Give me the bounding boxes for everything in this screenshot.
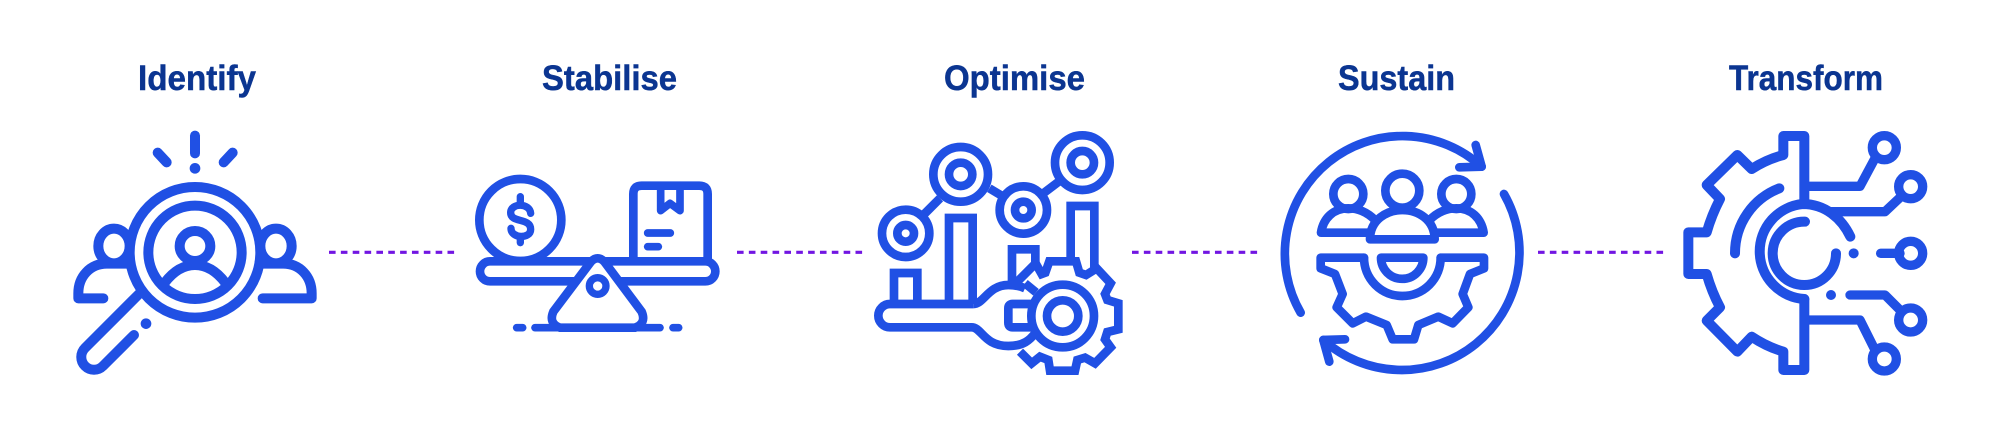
icon: chart, wrench and gear (878, 135, 1118, 371)
icon: half gear with circuit lines (1688, 136, 1923, 371)
heading: Optimise: Optimise (944, 59, 1085, 98)
icon: team in gear with cycle arrows (1285, 136, 1519, 370)
icon: balance scale with coin and box (479, 179, 715, 328)
heading: Transform: Transform (1729, 59, 1883, 98)
icon: magnifier over people (78, 136, 312, 370)
heading: Stabilise: Stabilise (542, 59, 677, 98)
connector: Identify to Stabilise (329, 251, 456, 254)
heading: Identify: Identify (138, 59, 257, 98)
heading: Sustain: Sustain (1338, 59, 1455, 98)
connector: Optimise to Sustain (1132, 251, 1259, 254)
connector: Sustain to Transform (1538, 251, 1665, 254)
connector: Stabilise to Optimise (737, 251, 864, 254)
